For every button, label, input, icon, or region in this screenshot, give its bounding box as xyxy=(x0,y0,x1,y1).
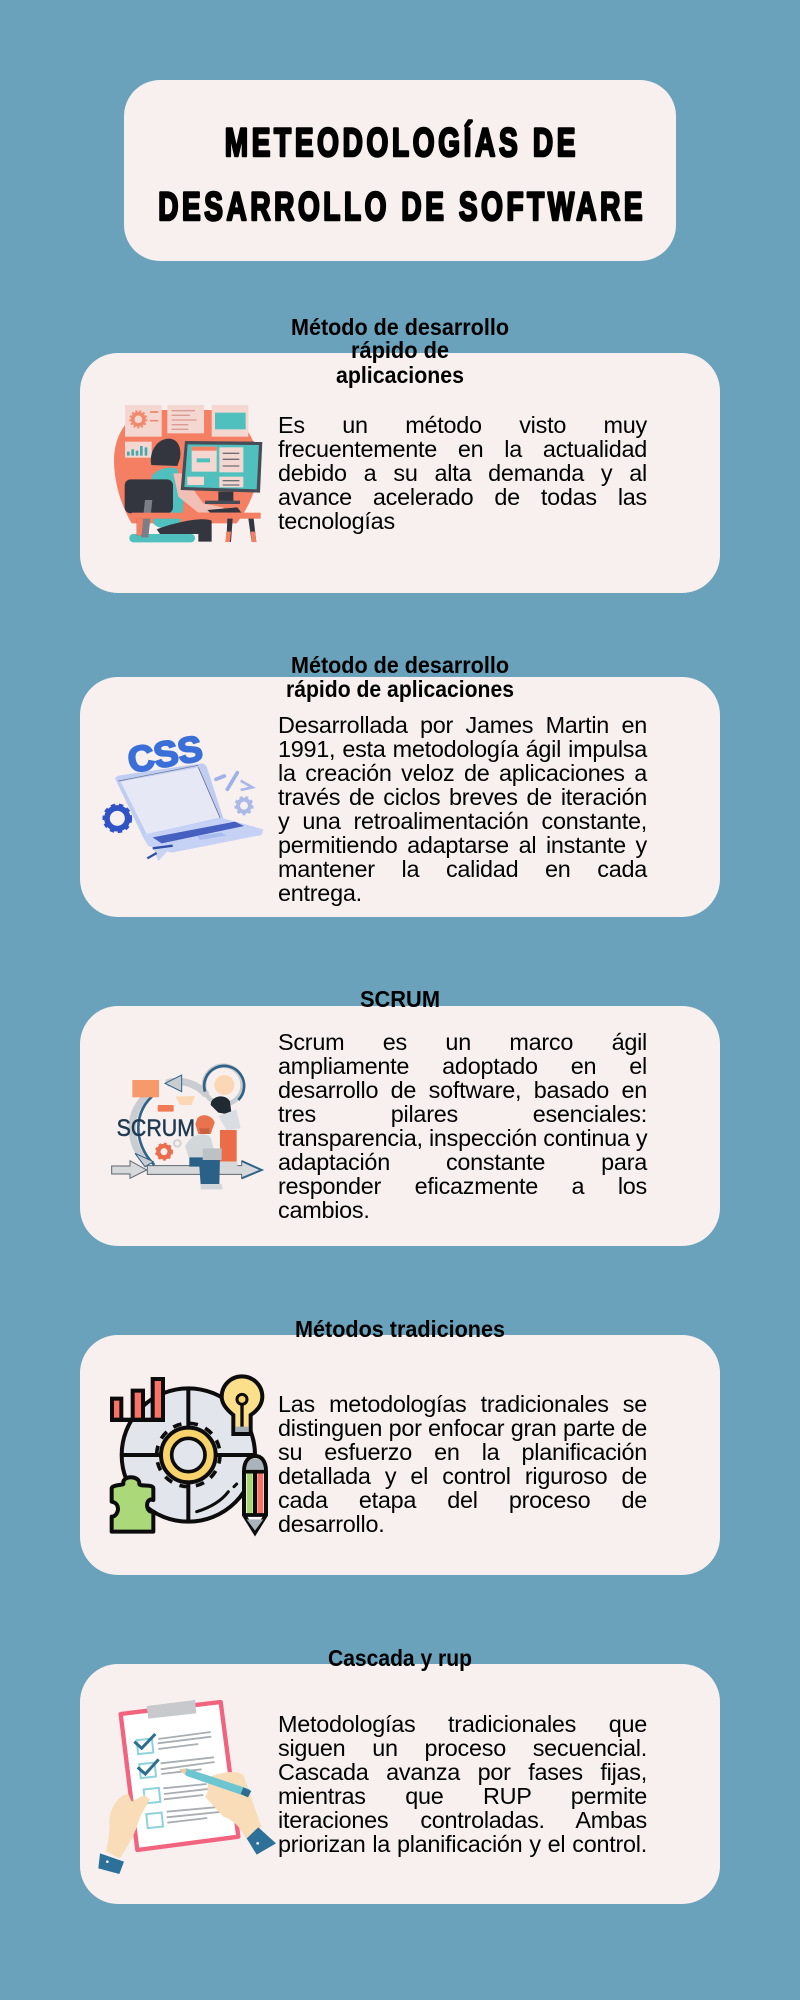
text block: card 2: Desarrollada por James Martin en xyxy=(278,712,647,738)
heading: SCRUM: SCRUM xyxy=(360,986,440,1012)
text block: card 5: Metodologías tradicionales que xyxy=(278,1711,647,1737)
text block: card 1 xyxy=(278,412,648,534)
title: METEODOLOGÍAS DE xyxy=(225,119,575,165)
title: DESARROLLO DE SOFTWARE xyxy=(158,185,643,229)
heading: card 2 xyxy=(286,652,514,702)
text block: card 5: siguen un proceso secuencial. xyxy=(278,1735,647,1761)
title panel xyxy=(124,80,676,261)
heading: cascada y rup: Cascada y rup xyxy=(328,1645,472,1671)
text block: card 1: avance acelerado de todas las xyxy=(278,484,647,510)
heading: card 1 xyxy=(291,314,509,388)
text block: card 3: cambios. xyxy=(278,1197,370,1223)
text block: card 2: permitiendo adaptarse al instante y xyxy=(278,832,647,858)
panel: card 4 xyxy=(80,1335,720,1575)
text block: card 4: Las metodologías tradicionales se xyxy=(278,1391,647,1417)
text block: card 2: mantener la calidad en cada xyxy=(278,856,647,882)
text block: card 2: través de ciclos breves de iteración xyxy=(278,784,647,810)
icon: css laptop: CSS xyxy=(124,727,205,781)
text block: card 1: debido a su alta demanda y al xyxy=(278,460,647,486)
heading: card 2: rápido de aplicaciones xyxy=(286,676,514,702)
text block: card 5: priorizan la planificación y el control. xyxy=(278,1831,647,1857)
text block: card 1: tecnologías xyxy=(278,508,395,534)
text block: card 5 xyxy=(278,1711,647,1857)
text block: card 2 xyxy=(278,712,648,906)
text block: card 3: Scrum es un marco ágil xyxy=(278,1029,647,1055)
text block: card 2: 1991, esta metodología ágil impulsa xyxy=(278,736,647,762)
heading: card 1: aplicaciones xyxy=(336,362,464,388)
heading: card 1: Método de desarrollo xyxy=(291,314,509,340)
panel: card 2 xyxy=(80,677,720,917)
text block: card 3: tres pilares esenciales: xyxy=(278,1101,647,1127)
panel: card 5 xyxy=(80,1664,720,1904)
text block: card 3: adaptación constante para xyxy=(278,1149,647,1175)
text block: card 3: desarrollo de software, basado en xyxy=(278,1077,647,1103)
text block: card 2: entrega. xyxy=(278,880,362,906)
text block: card 4: cada etapa del proceso de xyxy=(278,1487,647,1513)
icon: clipboard with hands xyxy=(98,1700,276,1874)
title xyxy=(158,119,643,229)
text block: card 1: frecuentemente en la actualidad xyxy=(278,436,647,462)
panel: card 3 xyxy=(80,1006,720,1246)
text block: card 3: transparencia, inspección continua y xyxy=(278,1125,647,1151)
text block: card 5: iteraciones controladas. Ambas xyxy=(278,1807,647,1833)
text block: card 5: mientras que RUP permite xyxy=(278,1783,647,1809)
panel: card 1 xyxy=(80,353,720,593)
text block: card 2: y una retroalimentación constante, xyxy=(278,808,647,834)
heading: card 2: Método de desarrollo xyxy=(291,652,509,678)
text block: card 3 xyxy=(278,1029,648,1223)
text block: card 4 xyxy=(278,1391,647,1537)
text block: card 4: desarrollo. xyxy=(278,1511,384,1537)
text block: card 4: detallada y el control riguroso de xyxy=(278,1463,647,1489)
text block: card 5: Cascada avanza por fases fijas, xyxy=(278,1759,647,1785)
icon: css laptop xyxy=(102,727,264,861)
text block: card 3: responder eficazmente a los xyxy=(278,1173,647,1199)
icon: scrum xyxy=(111,1063,264,1190)
heading: card 1: rápido de xyxy=(351,337,449,363)
icon: person at computer xyxy=(114,405,262,542)
text block: card 4: distinguen por enfocar gran parte de xyxy=(278,1415,647,1441)
icon: gear circle xyxy=(110,1374,268,1536)
heading: métodos tradiciones: Métodos tradiciones xyxy=(295,1316,505,1342)
text block: card 1: Es un método visto muy xyxy=(278,412,647,438)
text block: card 2: la creación veloz de aplicaciones a xyxy=(278,760,647,786)
icon: scrum: SCRUM xyxy=(117,1115,195,1142)
text block: card 4: su esfuerzo en la planificación xyxy=(278,1439,647,1465)
text block: card 3: ampliamente adoptado en el xyxy=(278,1053,647,1079)
